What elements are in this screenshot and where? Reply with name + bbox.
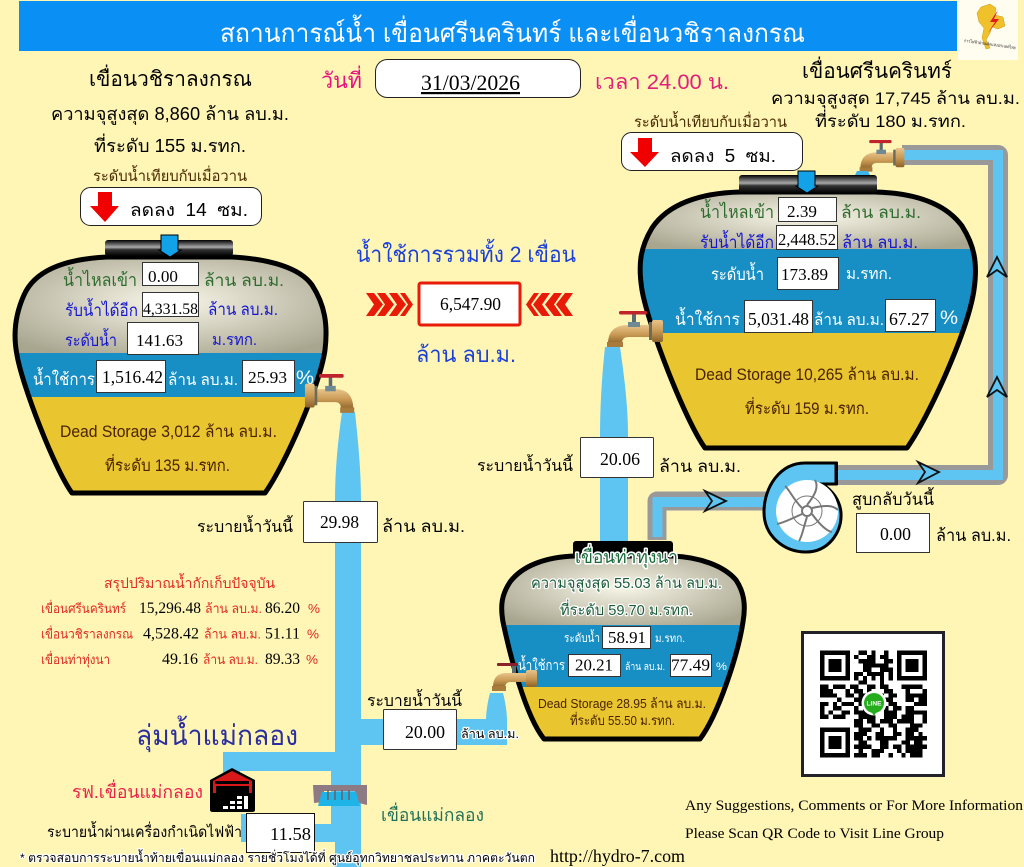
website link text: http://hydro-7.com: [550, 846, 685, 866]
release: Tha Thung Na: 20.00: [405, 722, 445, 742]
panel: total usable water: น้ำใช้การรวมทั้ง 2 เขื่อน: [356, 239, 576, 267]
icon: power house: [210, 768, 255, 812]
remaining capacity row: รับน้ำได้อีก: [700, 230, 774, 252]
panel: Srinagarind dam heading: [634, 56, 1020, 131]
panel: Vajiralongkorn dam heading: เขื่อนวชิราลงกรณ: [89, 64, 252, 91]
usable water row: ล้าน ลบ.ม.: [814, 311, 884, 329]
usable water row: 25.93: [248, 368, 287, 387]
water level row: ระดับน้ำ: [65, 328, 117, 350]
row: Vajiralongkorn: %: [307, 626, 319, 642]
release: Srinagarind: 20.06: [600, 449, 640, 469]
remaining capacity row: 2,448.52: [778, 230, 836, 249]
row: Srinagarind: ล้าน ลบ.ม.: [205, 601, 262, 616]
icon: tap Vajiralongkorn: [305, 374, 354, 413]
dam name and capacity: ที่ระดับ 59.70 ม.รทก.: [560, 599, 693, 619]
release: Vajiralongkorn: ระบายน้ำวันนี้: [197, 515, 293, 536]
panel: Vajiralongkorn reservoir pot: [0, 235, 340, 503]
water level row: ม.รทก.: [655, 633, 685, 645]
remaining capacity row: ล้าน ลบ.ม.: [208, 300, 278, 319]
inflow row: 0.00: [148, 267, 178, 286]
arrow: pipe inflow direction: [705, 491, 726, 511]
remaining capacity row: [65, 292, 278, 320]
row: Vajiralongkorn: 51.11: [265, 626, 300, 642]
label: Mae Klong dam: เขื่อนแม่กลอง: [381, 802, 484, 825]
callout: level change Srinagarind: ลดลง 5 ซม.: [670, 146, 776, 166]
panel: current storage summary: [41, 573, 320, 668]
pump back today: 0.00: [880, 524, 911, 544]
panel: current storage summary: สรุปปริมาณน้ำกักเก็บปัจจุบัน: [104, 573, 275, 592]
panel: Srinagarind reservoir pot: [630, 171, 985, 450]
release through generator: [47, 814, 314, 852]
release: Srinagarind: ล้าน ลบ.ม.: [659, 457, 741, 476]
usable water row: น้ำใช้การ: [518, 655, 565, 673]
row: Tha Thung Na: [41, 651, 318, 668]
row: Srinagarind: [41, 600, 320, 617]
water level row: 173.89: [781, 265, 828, 284]
row: Vajiralongkorn: ล้าน ลบ.ม.: [204, 626, 261, 642]
usable water row: น้ำใช้การ: [675, 307, 740, 329]
footer note: * ตรวจสอบการระบายน้ำท้ายเขื่อนแม่กลอง รายชั่วโมงได้ที่ ศูนย์อุทกวิทยาชลประทาน ภาคตะวันตก: [20, 849, 535, 866]
text: suggestions line two: Please Scan QR Code to Visit Line Group: [685, 826, 944, 842]
row: Vajiralongkorn: 4,528.42: [143, 626, 199, 642]
dead storage text: ที่ระดับ 159 ม.รทก.: [745, 397, 869, 418]
inflow row: [63, 262, 284, 290]
icon: LINE badge: LINE: [866, 700, 882, 708]
usable water row: 67.27: [889, 309, 929, 329]
pump back today: ล้าน ลบ.ม.: [936, 526, 1011, 545]
pot lid: [739, 175, 877, 193]
icon: left chevrons: [366, 293, 413, 316]
dead storage text: [695, 366, 919, 418]
usable water row: %: [296, 368, 314, 389]
panel: Vajiralongkorn dam heading: ความจุสูงสุด 8,860 ล้าน ลบ.ม.: [51, 104, 289, 125]
dead storage text: ที่ระดับ 135 ม.รทก.: [105, 454, 230, 475]
panel: Vajiralongkorn dam heading: ระดับน้ำเทียบกับเมื่อวาน: [93, 165, 247, 185]
release: Srinagarind: ระบายน้ำวันนี้: [477, 454, 573, 475]
icon: right chevrons: [526, 293, 573, 316]
callout: level change Srinagarind: [622, 132, 802, 170]
pump back today: สูบกลับวันนี้: [852, 487, 934, 510]
remaining capacity row: รับน้ำได้อีก: [65, 298, 138, 320]
row: Srinagarind: เขื่อนศรีนครินทร์: [41, 600, 126, 616]
time label: เวลา 24.00 น.: [595, 71, 729, 94]
icon: water splash under top tap: [855, 171, 870, 175]
row: Tha Thung Na: ล้าน ลบ.ม.: [203, 652, 258, 667]
panel: Vajiralongkorn dam heading: ที่ระดับ 155 ม.รทก.: [94, 133, 246, 156]
icon: inflow arrow: [796, 171, 818, 193]
heading: Mae Klong basin: ลุ่มน้ำแม่กลอง: [136, 715, 298, 753]
release: Tha Thung Na: [367, 689, 519, 750]
usable water row: 5,031.48: [748, 309, 809, 329]
panel: Srinagarind dam heading: ระดับน้ำเทียบกับเมื่อวาน: [634, 111, 787, 131]
panel: Tha Thung Na reservoir pot: [492, 541, 750, 742]
total value box: [419, 283, 520, 325]
icon: tap Tha Thung Na: [492, 663, 537, 691]
water level row: 141.63: [136, 331, 183, 350]
title banner: สถานการณ์น้ำ เขื่อนศรีนครินทร์ และเขื่อนวชิราลงกรณ: [220, 14, 805, 48]
release: Tha Thung Na: ระบายน้ำวันนี้: [367, 689, 462, 710]
release: Tha Thung Na: ล้าน ลบ.ม.: [461, 727, 519, 741]
panel: total usable water: [356, 239, 576, 367]
remaining capacity row: [700, 226, 918, 252]
row: Srinagarind: 15,296.48: [139, 600, 201, 617]
panel: Srinagarind dam heading: ความจุสูงสุด 17,745 ล้าน ลบ.ม.: [771, 89, 1020, 109]
inflow row: ล้าน ลบ.ม.: [841, 203, 921, 222]
arrow: pipe upward upper: [987, 257, 1007, 277]
row: Tha Thung Na: 89.33: [265, 651, 300, 668]
text: suggestions line one: Any Suggestions, Comments or For More Information: [685, 798, 1024, 814]
date box: [376, 60, 580, 98]
total value box: 6,547.90: [440, 294, 501, 314]
pot lid: [573, 541, 673, 557]
water level row: ระดับน้ำ: [711, 262, 764, 284]
dam name and capacity: เขื่อนท่าทุ่งนา: [575, 544, 678, 568]
dead storage text: [60, 423, 277, 475]
icon: Mae Klong dam: [313, 785, 367, 806]
row: Srinagarind: %: [308, 601, 320, 616]
inflow row: น้ำไหลเข้า: [63, 267, 137, 290]
release through generator: ระบายน้ำผ่านเครื่องกำเนิดไฟฟ้า: [47, 821, 242, 841]
usable water row: ล้าน ลบ.ม.: [168, 371, 238, 389]
icon: inflow arrow: [159, 235, 181, 257]
usable water row: [518, 654, 727, 676]
remaining capacity row: ล้าน ลบ.ม.: [842, 233, 918, 252]
inflow row: น้ำไหลเข้า: [700, 199, 774, 222]
inflow row: [700, 198, 921, 222]
usable water row: [675, 300, 958, 332]
water level row: ม.รทก.: [212, 332, 257, 349]
release: Srinagarind: [477, 438, 741, 478]
dead storage text: ที่ระดับ 55.50 ม.รทก.: [570, 712, 675, 728]
QR code card: [802, 632, 944, 776]
release: Vajiralongkorn: ล้าน ลบ.ม.: [382, 517, 465, 536]
usable water row: %: [940, 308, 958, 329]
title banner: [19, 1, 957, 51]
row: Srinagarind: 86.20: [265, 600, 300, 617]
water level row: ม.รทก.: [846, 266, 892, 283]
icon: tap top right pipe: [860, 140, 904, 172]
date label: วันที่: [321, 65, 362, 93]
callout: level change Vajiralongkorn: ลดลง 14 ซม.: [130, 200, 248, 220]
icon: tap Srinagarind: [607, 311, 663, 347]
remaining capacity row: 4,331.58: [143, 301, 198, 318]
dead storage text: Dead Storage 28.95 ล้าน ลบ.ม.: [538, 696, 706, 711]
pump back today: [852, 487, 1011, 552]
release: Vajiralongkorn: [197, 502, 465, 542]
date box: 31/03/2026: [421, 70, 520, 95]
arrow: pipe upward lower: [987, 377, 1007, 397]
label: Mae Klong power plant: รฟ.เขื่อนแม่กลอง: [72, 779, 203, 802]
row: Tha Thung Na: %: [306, 652, 318, 667]
release: Vajiralongkorn: 29.98: [320, 512, 359, 532]
panel: Srinagarind dam heading: ที่ระดับ 180 ม.รทก.: [815, 109, 966, 131]
usable water row: น้ำใช้การ: [33, 367, 95, 389]
water level row: 58.91: [608, 628, 646, 647]
logo: EGAT Thailand map: [958, 0, 1018, 60]
water channels: [223, 347, 628, 867]
water level row: [711, 258, 892, 290]
usable water row: [33, 360, 314, 392]
dead storage text: [538, 696, 706, 728]
panel: total usable water: ล้าน ลบ.ม.: [416, 342, 516, 367]
dam name and capacity: ความจุสูงสุด 55.03 ล้าน ลบ.ม.: [531, 575, 722, 593]
inflow row: ล้าน ลบ.ม.: [204, 271, 284, 290]
water level row: [65, 322, 257, 354]
row: Tha Thung Na: เขื่อนท่าทุ่งนา: [41, 651, 110, 668]
usable water row: 20.21: [575, 656, 613, 674]
dead storage text: Dead Storage 3,012 ล้าน ลบ.ม.: [60, 423, 277, 441]
icon: LINE badge: [862, 690, 886, 716]
release through generator: 11.58: [270, 824, 311, 844]
dead storage text: Dead Storage 10,265 ล้าน ลบ.ม.: [695, 366, 919, 384]
row: Vajiralongkorn: เขื่อนวชิราลงกรณ: [41, 626, 133, 642]
water level row: ระดับน้ำ: [564, 629, 600, 645]
pot lid: [105, 240, 233, 256]
row: Tha Thung Na: 49.16: [162, 651, 198, 668]
inflow row: 2.39: [787, 202, 817, 221]
callout: level change Vajiralongkorn: [80, 188, 262, 226]
usable water row: 1,516.42: [102, 367, 163, 387]
usable water row: ล้าน ลบ.ม.: [625, 661, 665, 673]
panel: Srinagarind dam heading: เขื่อนศรีนครินทร์: [802, 56, 952, 83]
row: Vajiralongkorn: [41, 626, 319, 642]
return pipe with pump: [657, 155, 1007, 552]
water level row: [564, 626, 685, 648]
dam name and capacity: [531, 544, 722, 619]
usable water row: %: [716, 661, 727, 673]
usable water row: 77.49: [671, 656, 710, 674]
arrow: pipe direction: [918, 462, 939, 483]
panel: Vajiralongkorn dam heading: [51, 64, 289, 185]
icon: pump: [764, 462, 841, 552]
